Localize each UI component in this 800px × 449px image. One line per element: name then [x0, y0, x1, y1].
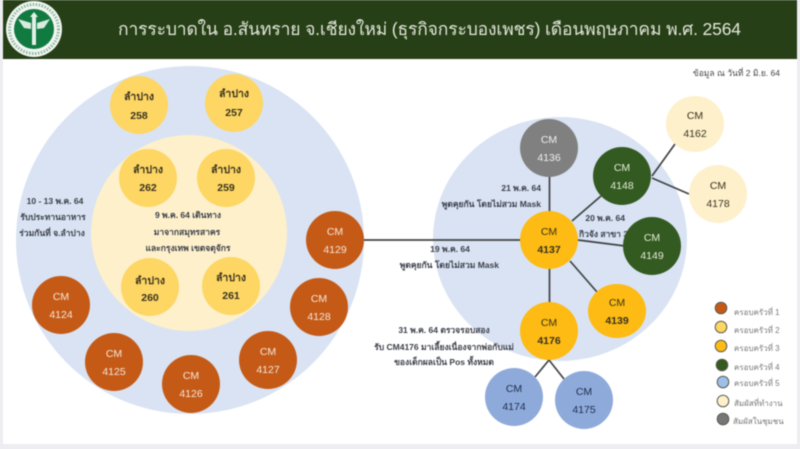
- case group: family 1 orange: CM: [106, 348, 122, 360]
- case group: family 3 amber: CM: [541, 226, 557, 238]
- title: การระบาดใน อ.สันทราย จ.เชียงใหม่ (ธุรกิจกระบองเพชร) เดือนพฤษภาคม พ.ศ. 2564: [118, 19, 741, 40]
- case group: workplace contacts: 4162: [683, 128, 707, 140]
- case group: Lampang cases: ลำปาง: [211, 164, 241, 176]
- legend: [715, 302, 784, 426]
- case group: family 1 orange: CM: [311, 293, 327, 305]
- case group: family 5 blue: CM: [506, 383, 522, 395]
- text: shared meal note: ร่วมกันที่ จ.ลำปาง: [19, 226, 85, 238]
- data date note: ข้อมูล ณ วันที่ 2 มิ.ย. 64: [693, 67, 780, 79]
- legend: ครอบครัวที่ 5: [734, 377, 780, 388]
- case: community contact CM 4136: 4136: [537, 152, 561, 164]
- case group: family 3 amber: CM: [541, 317, 557, 329]
- case group: Lampang cases: ลำปาง: [219, 88, 249, 100]
- text: travel note: มาจากสมุทรสาคร: [154, 227, 221, 238]
- case group: family 5 blue: 4175: [572, 404, 596, 416]
- legend: ครอบครัวที่ 2: [734, 324, 780, 335]
- case group: workplace contacts: CM: [710, 180, 726, 192]
- text: contact notes: พูดคุยกัน โดยไม่สวม Mask: [400, 260, 499, 271]
- case group: family 1 orange: 4127: [256, 364, 280, 376]
- case group: family 1 orange: CM: [260, 346, 276, 358]
- case group: family 1 orange: 4124: [49, 309, 73, 321]
- case group: Lampang cases: ลำปาง: [135, 275, 165, 287]
- case group: Lampang cases: ลำปาง: [216, 272, 246, 284]
- text: contact notes: รับ CM4176 มาเลี้ยงเนื่องจากพ่อกับแม่: [374, 340, 514, 352]
- case group: family 4 green: 4148: [610, 180, 634, 192]
- case group: Lampang cases: 257: [225, 107, 243, 119]
- case: community contact CM 4136: [520, 119, 578, 177]
- text: contact notes: กิวจัง สาขา 3: [579, 229, 628, 239]
- case group: family 3 amber: [520, 211, 646, 360]
- case group: family 4 green: CM: [614, 162, 630, 174]
- case group: workplace contacts: [666, 96, 747, 223]
- text: contact notes: ของเด็กผลเป็น Pos ทั้งหมด: [394, 355, 494, 367]
- case group: Lampang cases: 258: [130, 110, 148, 122]
- legend: สัมผัสในชุมชน: [733, 417, 784, 426]
- case group: Lampang cases: 262: [139, 182, 157, 194]
- legend: ครอบครัวที่ 3: [734, 342, 780, 353]
- case group: Lampang cases: 261: [222, 290, 240, 302]
- legend: ครอบครัวที่ 4: [734, 361, 780, 372]
- text: shared meal note: [19, 196, 86, 238]
- text: travel note: และกรุงเทพ เขตจตุจักร: [145, 243, 231, 254]
- text: contact notes: 20 พ.ค. 64: [585, 213, 625, 223]
- case group: family 1 orange: [32, 211, 364, 413]
- panel: inner Lampang group circle: [91, 135, 287, 331]
- case group: workplace contacts: 4178: [706, 198, 730, 210]
- panel: left cluster background circle: [16, 66, 364, 414]
- text: shared meal note: 10 - 13 พ.ค. 64: [27, 196, 84, 206]
- case group: Lampang cases: ลำปาง: [133, 164, 163, 176]
- case group: family 3 amber: CM: [609, 297, 625, 309]
- text: travel note: 9 พ.ค. 64 เดินทาง: [155, 210, 221, 220]
- case group: family 3 amber: 4139: [605, 315, 629, 327]
- text: travel note: [145, 210, 231, 254]
- case group: family 3 amber: 4176: [537, 335, 561, 347]
- case group: family 5 blue: CM: [576, 386, 592, 398]
- case group: family 4 green: CM: [644, 232, 660, 244]
- case group: family 1 orange: 4125: [102, 366, 126, 378]
- case group: family 1 orange: CM: [327, 226, 343, 238]
- connector lines: [364, 144, 689, 379]
- icon: ministry of public health seal: [6, 1, 62, 57]
- text: contact notes: [374, 183, 628, 367]
- text: contact notes: 21 พ.ค. 64: [501, 183, 541, 193]
- case group: workplace contacts: CM: [687, 110, 703, 122]
- case group: family 3 amber: 4137: [537, 244, 561, 256]
- case group: family 1 orange: 4128: [307, 311, 331, 323]
- panel: right cluster background circle: [433, 117, 687, 361]
- legend: ครอบครัวที่ 1: [734, 306, 780, 317]
- case group: Lampang cases: 260: [141, 292, 159, 304]
- text: shared meal note: รับประทานอาหาร: [20, 212, 86, 222]
- case group: Lampang cases: ลำปาง: [124, 91, 154, 103]
- case group: family 4 green: 4149: [640, 250, 664, 262]
- header banner: [3, 0, 797, 59]
- case group: Lampang cases: [110, 74, 263, 316]
- text: contact notes: พูดคุยกัน โดยไม่สวม Mask: [442, 199, 541, 210]
- case group: Lampang cases: 259: [217, 182, 235, 194]
- text: contact notes: 19 พ.ค. 64: [430, 244, 470, 254]
- case: community contact CM 4136: CM: [541, 134, 557, 146]
- case group: family 5 blue: [485, 368, 613, 429]
- text: contact notes: 31 พ.ค. 64 ตรวจรอบสอง: [398, 325, 490, 335]
- case group: family 1 orange: 4129: [323, 244, 347, 256]
- case group: family 1 orange: 4126: [179, 388, 203, 400]
- case group: family 1 orange: CM: [183, 370, 199, 382]
- legend: สัมผัสที่ทำงาน: [734, 397, 783, 408]
- case group: family 1 orange: CM: [53, 291, 69, 303]
- case group: family 4 green: [593, 147, 681, 275]
- case group: family 5 blue: 4174: [502, 401, 526, 413]
